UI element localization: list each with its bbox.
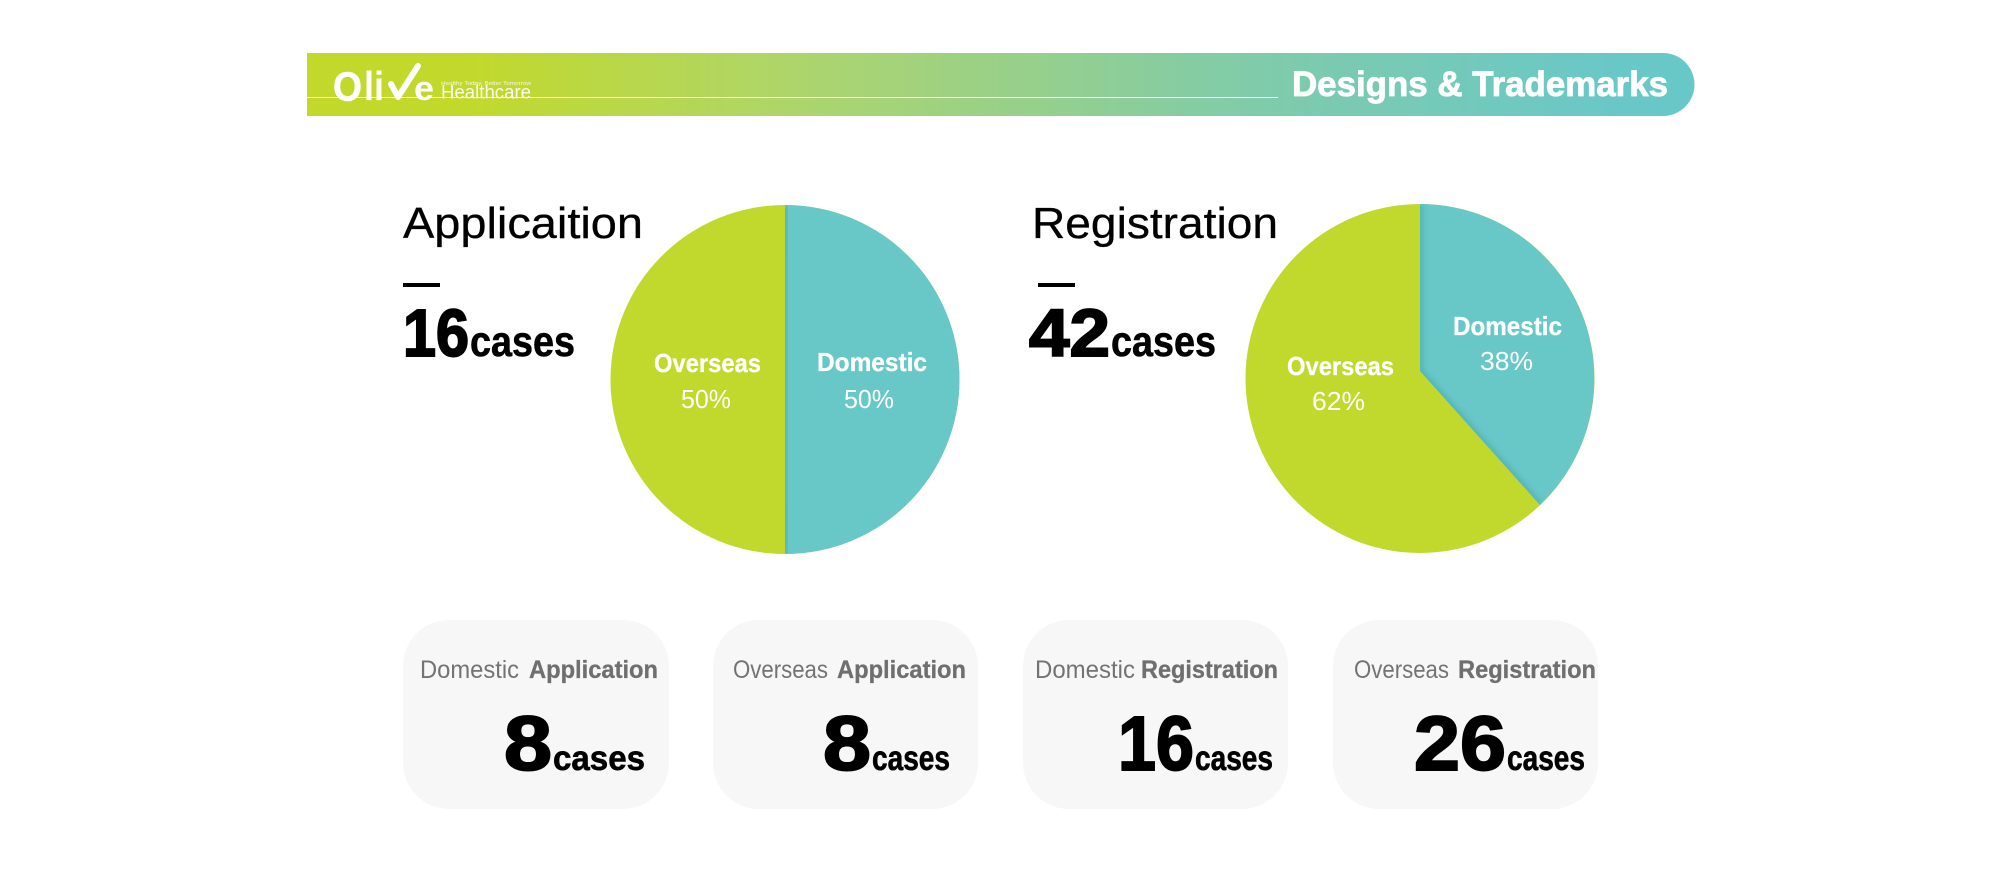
label: domestic 50%: [817, 347, 927, 414]
pie chart: application: [610, 205, 960, 554]
label: overseas 50%: Overseas: [654, 348, 761, 378]
card: domestic registration: 16: [1118, 701, 1194, 787]
logo: Olive Healthcare: l: [364, 63, 374, 109]
label: domestic 38%: 38%: [1480, 346, 1533, 376]
card: domestic registration: Registration: [1141, 656, 1278, 684]
label: domestic 50%: 50%: [844, 384, 894, 414]
card: overseas registration: [1333, 620, 1598, 809]
card: domestic application: Application: [529, 656, 658, 684]
total: 16 cases: [403, 296, 575, 371]
label: domestic 38%: Domestic: [1453, 311, 1562, 341]
logo: Olive Healthcare: e: [414, 70, 434, 108]
card: domestic application: [403, 620, 669, 809]
header banner: [307, 53, 1695, 116]
label: domestic 50%: Domestic: [817, 347, 927, 377]
card: domestic application: Domestic: [420, 656, 519, 684]
logo: Olive Healthcare: i: [374, 63, 384, 109]
logo: Olive Healthcare: [333, 63, 531, 110]
total: 16 cases: cases: [470, 318, 575, 366]
panel: registration summary: [1029, 199, 1278, 371]
card: overseas registration: 26: [1414, 701, 1506, 787]
logo: Olive Healthcare: O: [333, 64, 362, 110]
card: overseas application: 8: [823, 701, 871, 787]
card: overseas application: Overseas: [733, 656, 828, 684]
card: overseas application: cases: [872, 739, 950, 778]
card: overseas application: Application: [837, 656, 966, 684]
card: domestic registration: Domestic: [1035, 656, 1135, 684]
total: 42 cases: 42: [1029, 296, 1110, 371]
pie chart: registration: [1246, 204, 1594, 553]
total: 16 cases: 16: [403, 296, 469, 371]
card: domestic application: cases: [553, 739, 645, 778]
heading: registration: Registration: [1032, 199, 1278, 248]
card: overseas registration: Overseas: [1354, 656, 1449, 684]
card: overseas registration: cases: [1507, 739, 1585, 778]
total: 42 cases: [1029, 296, 1216, 371]
label: overseas 62%: Overseas: [1287, 351, 1394, 381]
label: overseas 50%: [654, 348, 761, 414]
card: domestic application: 8: [504, 701, 552, 787]
logo: Olive Healthcare: Healthy Today, Better Tomorrow: [441, 81, 531, 87]
card: domestic registration: [1023, 620, 1288, 809]
header title: Designs & Trademarks: [1292, 65, 1668, 104]
total: 42 cases: cases: [1111, 318, 1216, 366]
label: domestic 38%: [1453, 311, 1562, 376]
logo: Olive Healthcare: Healthcare: [441, 82, 531, 104]
card: domestic registration: cases: [1195, 739, 1273, 778]
label: overseas 50%: 50%: [681, 384, 731, 414]
card: overseas registration: Registration: [1458, 656, 1596, 684]
card: overseas application: [713, 620, 978, 809]
panel: application summary: [403, 199, 643, 371]
label: overseas 62%: [1287, 351, 1394, 416]
heading: application: Applicaition: [403, 199, 643, 248]
label: overseas 62%: 62%: [1312, 386, 1365, 416]
